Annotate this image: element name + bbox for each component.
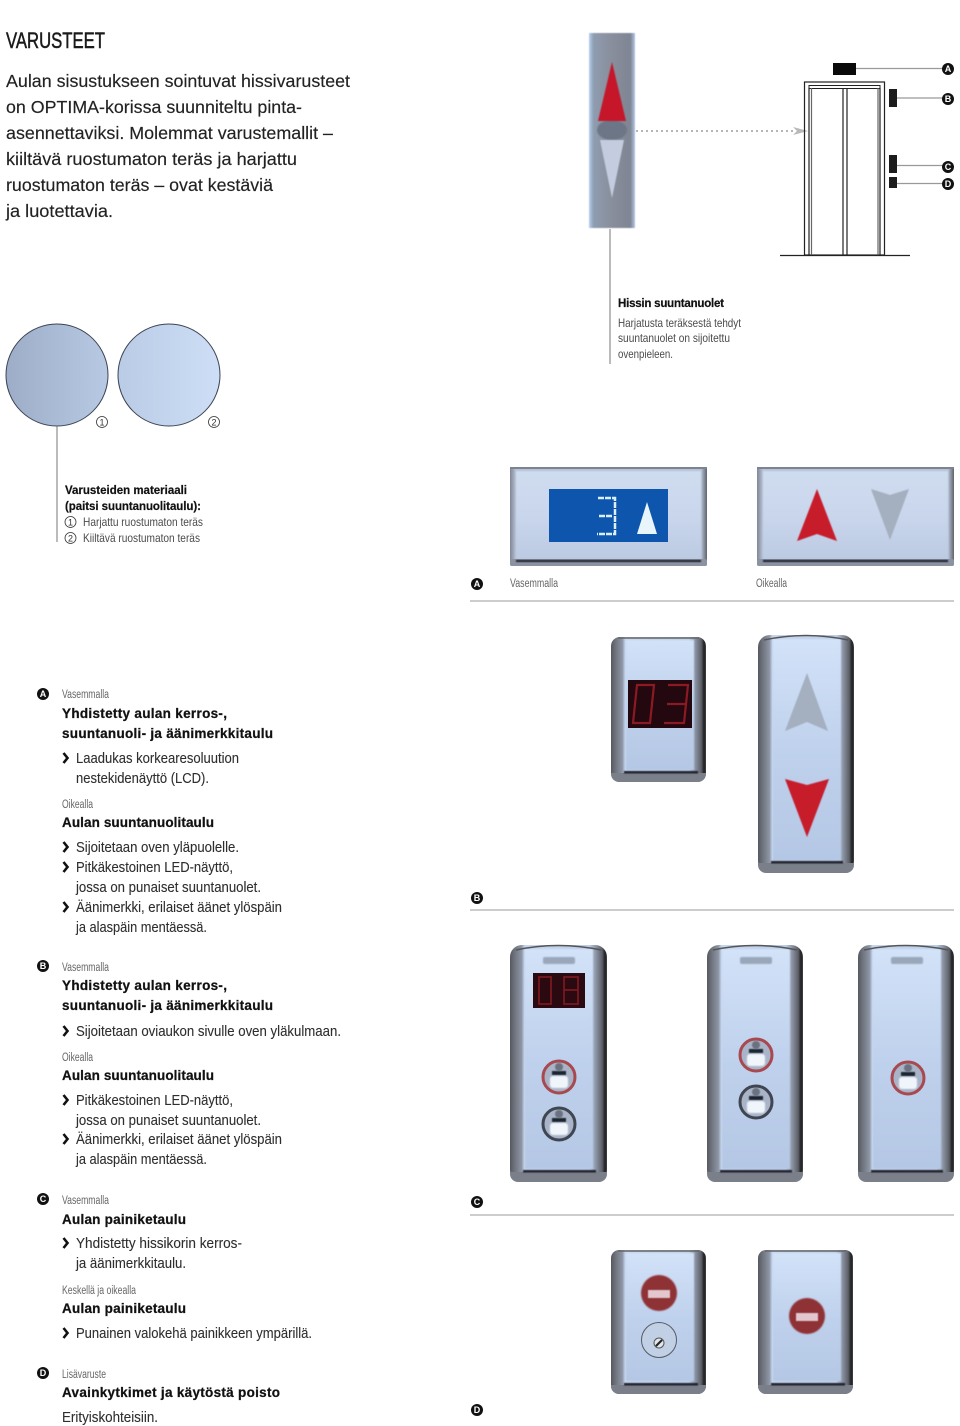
- blue LCD display: [549, 489, 668, 542]
- caption: direction arrows: [618, 298, 742, 361]
- leader line: materials: [56, 426, 58, 542]
- red LED display: [628, 680, 692, 728]
- section D text: [37, 1367, 280, 1426]
- marker C: C: [945, 162, 952, 172]
- icon: red down arrow: [785, 779, 829, 837]
- section C text: Keskellä ja oikealla: [62, 1285, 136, 1297]
- caption: materials: [65, 485, 203, 545]
- label row C: C: [474, 1197, 481, 1207]
- marker A: A: [945, 64, 952, 74]
- section C text: Yhdistetty hissikorin kerros-: [76, 1235, 242, 1252]
- icon: grey down arrow: [871, 489, 909, 540]
- section A text: nestekidenäyttö (LCD).: [76, 770, 209, 787]
- section B text: B: [40, 961, 47, 971]
- section A text: A: [40, 689, 47, 699]
- section A text: jossa on punaiset suuntanuolet.: [75, 879, 261, 896]
- section A text: Sijoitetaan oven yläpuolelle.: [76, 839, 239, 856]
- leader line: pillar: [609, 229, 611, 364]
- marker C: [889, 155, 954, 173]
- panel D1: button and key switch: [611, 1250, 706, 1394]
- label row A: Vasemmalla: [510, 578, 558, 590]
- panel C1: display with two buttons: [510, 945, 607, 1182]
- section A text: [37, 688, 282, 936]
- icon: red up arrow: [598, 62, 626, 121]
- intro text: Aulan sisustukseen sointuvat hissivarusteet: [6, 71, 350, 91]
- red button: [789, 1298, 825, 1334]
- label row A: A: [474, 579, 481, 589]
- section D text: Erityiskohteisiin.: [62, 1409, 158, 1426]
- panel A left: display panel: [510, 467, 707, 566]
- icon: red up arrow: [797, 489, 837, 541]
- section B text: Sijoitetaan oviaukon sivulle oven yläkulmaan.: [76, 1023, 341, 1040]
- section C text: Aulan painiketaulu: [62, 1212, 186, 1227]
- section B text: Aulan suuntanuolitaulu: [62, 1068, 214, 1083]
- direction arrow pillar photo: [589, 33, 635, 228]
- section C text: Punainen valokehä painikkeen ympärillä.: [76, 1325, 312, 1342]
- marker B: B: [945, 94, 952, 104]
- label row B: B: [474, 893, 481, 903]
- label D: [471, 1404, 483, 1416]
- intro text: [5, 71, 350, 221]
- marker D: [889, 177, 954, 190]
- panel B right: vertical arrow panel: [758, 635, 854, 873]
- red call button: [892, 1062, 924, 1094]
- label row B: [471, 892, 483, 904]
- caption: direction arrows: ovenpieleen.: [618, 347, 673, 361]
- panel B left: floor display: [611, 637, 706, 782]
- red LED display: [533, 973, 585, 1008]
- marker A: [833, 63, 954, 75]
- caption: materials: Kiiltävä ruostumaton teräs: [83, 531, 200, 545]
- dark call button: [543, 1108, 575, 1140]
- label row A: [471, 578, 787, 590]
- section A text: Äänimerkki, erilaiset äänet ylöspäin: [76, 899, 282, 916]
- section A text: Aulan suuntanuolitaulu: [62, 815, 214, 830]
- section B text: Yhdistetty aulan kerros-,: [62, 978, 227, 993]
- caption: materials: 2: [68, 534, 73, 544]
- panel A right: arrow panel: [757, 467, 954, 566]
- intro text: on OPTIMA-korissa suunniteltu pinta-: [6, 97, 302, 117]
- label row C: [471, 1196, 483, 1208]
- section C text: ja äänimerkkitaulu.: [75, 1255, 186, 1272]
- logo plate: [543, 957, 575, 964]
- section B text: ja alaspäin mentäessä.: [75, 1151, 207, 1168]
- panel C3: one button: [858, 945, 954, 1182]
- material sample 2: 2: [211, 418, 217, 428]
- section B text: Äänimerkki, erilaiset äänet ylöspäin: [76, 1131, 282, 1148]
- section A text: Vasemmalla: [62, 689, 109, 701]
- section D text: D: [40, 1368, 47, 1378]
- section A text: suuntanuoli- ja äänimerkkitaulu: [62, 726, 273, 741]
- section C text: Vasemmalla: [62, 1195, 109, 1207]
- door elevation diagram: [780, 63, 954, 256]
- label row A: Oikealla: [756, 578, 787, 590]
- section B text: suuntanuoli- ja äänimerkkitaulu: [62, 998, 273, 1013]
- section B text: jossa on punaiset suuntanuolet.: [75, 1112, 261, 1129]
- caption: materials: 1: [68, 518, 73, 528]
- marker D: D: [945, 179, 952, 189]
- section B text: Pitkäkestoinen LED-näyttö,: [76, 1092, 233, 1109]
- intro text: ruostumaton teräs – ovat kestäviä: [6, 175, 273, 195]
- caption: materials: Varusteiden materiaali: [65, 485, 187, 497]
- section C text: [37, 1193, 312, 1342]
- section B text: Vasemmalla: [62, 962, 109, 974]
- logo plate: [740, 957, 772, 964]
- section B text: [37, 960, 341, 1168]
- intro text: kiiltävä ruostumaton teräs ja harjattu: [6, 149, 297, 169]
- marker B: [889, 89, 954, 107]
- red call button: [740, 1039, 772, 1071]
- icon: grey up arrow: [785, 673, 828, 731]
- section C text: Aulan painiketaulu: [62, 1301, 186, 1316]
- section A text: Oikealla: [62, 799, 93, 811]
- label D: D: [474, 1405, 481, 1415]
- caption: direction arrows: Hissin suuntanuolet: [618, 298, 724, 310]
- title: VARUSTEET: [6, 28, 105, 53]
- panel D2: single button: [758, 1250, 853, 1394]
- intro text: ja luotettavia.: [5, 201, 113, 221]
- section D text: Lisävaruste: [62, 1369, 106, 1381]
- intro text: asennettaviksi. Molemmat varustemallit –: [6, 123, 333, 143]
- key switch: [642, 1322, 676, 1358]
- material sample 1: [6, 324, 108, 428]
- section A text: Yhdistetty aulan kerros-,: [62, 706, 227, 721]
- caption: materials: (paitsi suuntanuolitaulu):: [65, 501, 201, 513]
- caption: materials: Harjattu ruostumaton teräs: [83, 515, 203, 529]
- red button: [641, 1275, 677, 1311]
- red call button: [543, 1061, 575, 1093]
- dark call button: [740, 1086, 772, 1118]
- section C text: C: [40, 1194, 47, 1204]
- panel C2: two buttons: [707, 945, 803, 1182]
- section A text: Laadukas korkearesoluution: [76, 750, 239, 767]
- caption: direction arrows: suuntanuolet on sijoitettu: [618, 331, 730, 345]
- material sample 2: [118, 324, 220, 428]
- section A text: ja alaspäin mentäessä.: [75, 919, 207, 936]
- caption: direction arrows: Harjatusta teräksestä tehdyt: [618, 316, 742, 330]
- section B text: Oikealla: [62, 1052, 93, 1064]
- dotted arrow to door: [636, 127, 808, 135]
- icon: unlit down arrow: [600, 140, 624, 198]
- logo plate: [891, 957, 923, 964]
- section D text: Avainkytkimet ja käytöstä poisto: [62, 1385, 280, 1400]
- section A text: Pitkäkestoinen LED-näyttö,: [76, 859, 233, 876]
- material sample 1: 1: [99, 418, 105, 428]
